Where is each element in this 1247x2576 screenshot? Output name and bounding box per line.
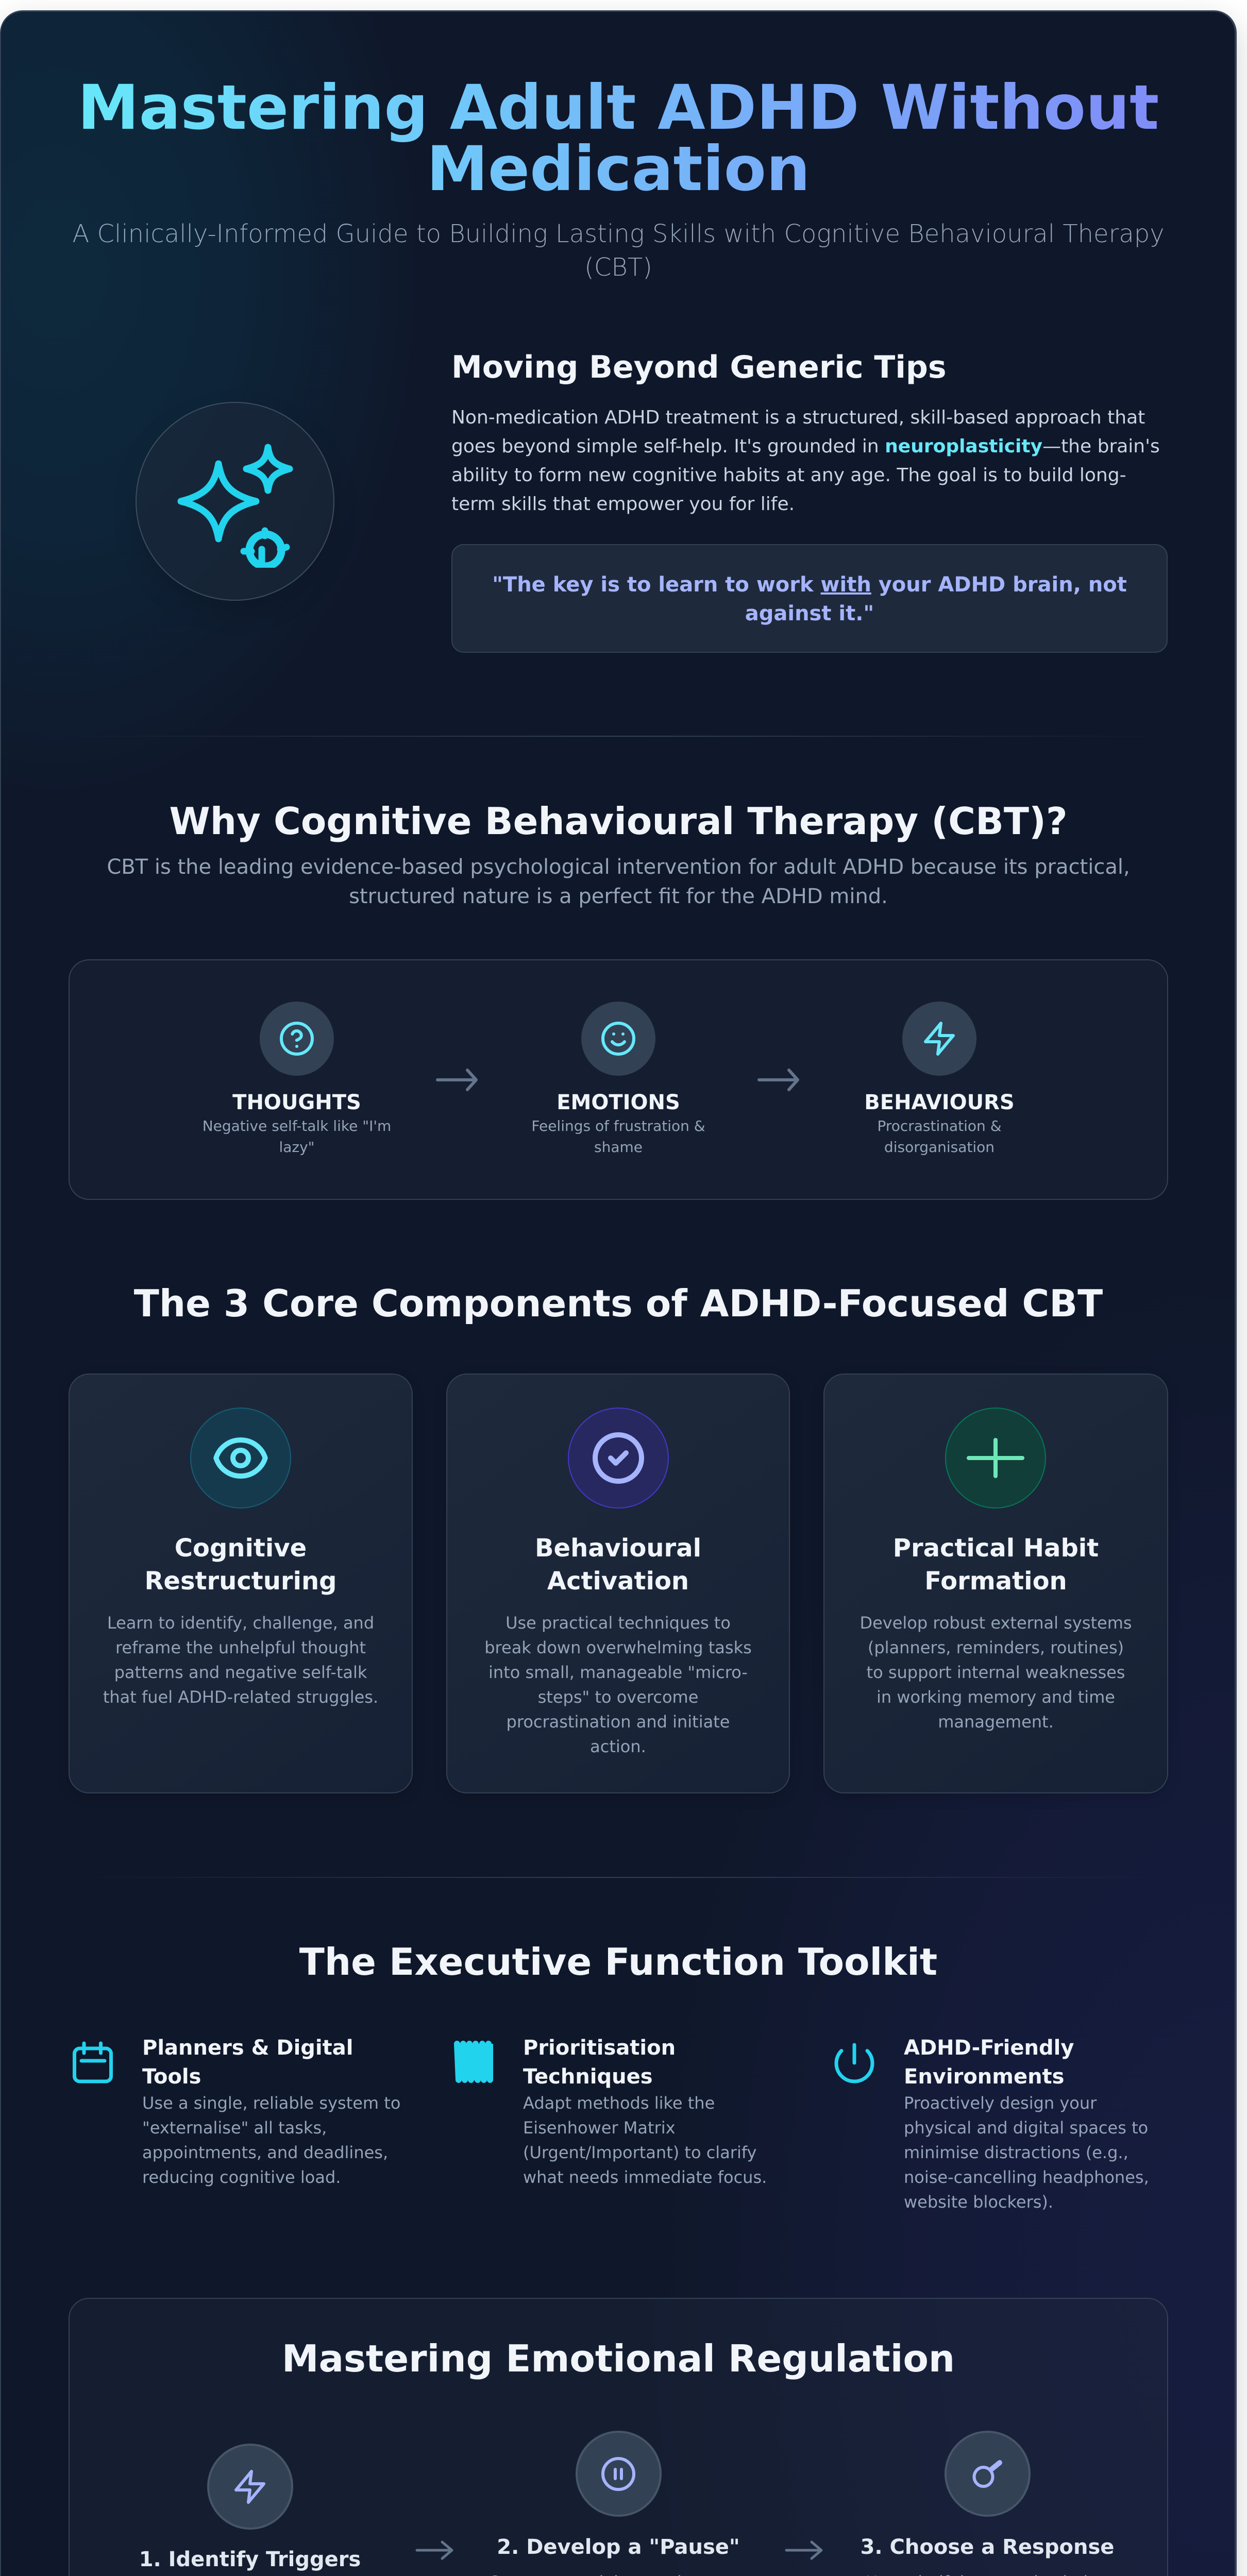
card text — [70, 1611, 412, 1709]
subtitle: (CBT) — [584, 253, 652, 282]
card text — [447, 1611, 789, 1759]
step: emotions — [531, 1002, 705, 1155]
step title: 3. Choose a Response — [861, 2535, 1114, 2559]
body text: goes beyond simple self-help. It's grounded in neuroplasticity—the brain's — [451, 436, 1160, 457]
card text: that fuel ADHD-related struggles. — [103, 1687, 378, 1707]
icon: lightning — [207, 2444, 293, 2530]
card title: Restructuring — [144, 1567, 337, 1596]
card text — [824, 1611, 1167, 1734]
item text — [142, 2091, 400, 2190]
card text: break down overwhelming tasks — [484, 1638, 752, 1657]
arrow — [757, 1069, 799, 1091]
step title: 1. Identify Triggers — [139, 2548, 361, 2571]
step title: 2. Develop a "Pause" — [497, 2535, 740, 2559]
item text: appointments, and deadlines, — [142, 2143, 388, 2162]
icon: plus — [945, 1408, 1046, 1509]
card title: Formation — [924, 1567, 1067, 1596]
section: executive function toolkit — [69, 1929, 1168, 2218]
section: core components — [69, 1282, 1168, 1793]
icon: question — [260, 1002, 334, 1076]
item text: noise-cancelling headphones, — [904, 2167, 1149, 2187]
card text: management. — [938, 1712, 1054, 1732]
label: EMOTIONS — [557, 1091, 680, 1114]
title — [69, 78, 1168, 200]
card title — [447, 1532, 789, 1598]
item text: Adapt methods like the — [523, 2093, 715, 2113]
card text: action. — [590, 1737, 646, 1756]
description: disorganisation — [884, 1139, 995, 1155]
label: BEHAVIOURS — [864, 1091, 1015, 1114]
body text — [451, 407, 1160, 515]
card text: to support internal weaknesses — [867, 1663, 1125, 1682]
item title: Prioritisation — [523, 2036, 676, 2060]
description: lazy" — [279, 1139, 315, 1155]
description — [877, 1117, 1002, 1155]
arrow — [784, 2540, 823, 2561]
icon: check circle — [568, 1408, 669, 1509]
arrow — [436, 1069, 478, 1091]
icon: calendar — [69, 2038, 120, 2084]
panel: emotional regulation — [69, 2298, 1168, 2576]
item text: website blockers). — [904, 2192, 1053, 2212]
item title: ADHD-Friendly — [904, 2036, 1074, 2060]
icon: spoon — [944, 2431, 1031, 2517]
body text: Non-medication ADHD treatment is a structured, skill-based approach that — [451, 407, 1145, 428]
item: planners — [69, 2033, 419, 2188]
card text: Use practical techniques to — [505, 1613, 731, 1633]
heading: The 3 Core Components of ADHD-Focused CBT — [134, 1282, 1103, 1325]
callout quote — [451, 544, 1168, 653]
card title: Cognitive — [175, 1534, 307, 1563]
card text: into small, manageable "micro- — [488, 1663, 748, 1682]
item text — [904, 2091, 1149, 2214]
card text: Learn to identify, challenge, and — [107, 1613, 374, 1633]
heading: Moving Beyond Generic Tips — [451, 349, 947, 385]
card text: procrastination and initiate — [507, 1712, 730, 1732]
item title — [142, 2033, 353, 2091]
item text: minimise distractions (e.g., — [904, 2143, 1128, 2162]
card title: Practical Habit — [893, 1534, 1099, 1563]
description: Feelings of frustration & — [531, 1117, 705, 1134]
card: cognitive restructuring — [69, 1374, 413, 1793]
item title: Environments — [904, 2065, 1064, 2089]
intro text: structured nature is a perfect fit for the ADHD mind. — [349, 885, 888, 908]
card text: patterns and negative self-talk — [114, 1663, 367, 1682]
step: identify triggers — [85, 2444, 415, 2576]
intro text — [107, 855, 1130, 908]
card text: in working memory and time — [877, 1687, 1115, 1707]
icon: priority block — [449, 2038, 501, 2084]
description: Negative self-talk like "I'm — [203, 1117, 391, 1134]
step: thoughts — [203, 1002, 391, 1155]
icon: eye — [190, 1408, 291, 1509]
panel: moving beyond generic tips — [136, 349, 1168, 653]
item text: "externalise" all tasks, — [142, 2118, 327, 2138]
item text: Eisenhower Matrix — [523, 2118, 676, 2138]
card title — [824, 1532, 1167, 1598]
heading: Why Cognitive Behavioural Therapy (CBT)? — [169, 800, 1068, 843]
step: behaviours — [864, 1002, 1015, 1155]
icon: pause — [575, 2431, 662, 2517]
icon: lightning — [902, 1002, 976, 1076]
card text: steps" to overcome — [538, 1687, 698, 1707]
heading: Mastering Emotional Regulation — [282, 2337, 955, 2380]
item text: what needs immediate focus. — [523, 2167, 767, 2187]
item title — [904, 2033, 1074, 2091]
step: choose a response — [822, 2431, 1152, 2576]
card text: (planners, reminders, routines) — [868, 1638, 1124, 1657]
title: Medication — [427, 133, 810, 205]
step: develop a pause — [453, 2431, 783, 2576]
item title: Techniques — [523, 2065, 653, 2089]
card: behavioural activation — [446, 1374, 790, 1793]
subtitle: A Clinically-Informed Guide to Building Lasting Skills with Cognitive Behavioural Therapy — [72, 219, 1165, 248]
title: Mastering Adult ADHD Without — [78, 72, 1159, 144]
item text: Use a single, reliable system to — [142, 2093, 400, 2113]
description: Procrastination & — [877, 1117, 1002, 1134]
item text: reducing cognitive load. — [142, 2167, 341, 2187]
label: THOUGHTS — [232, 1091, 361, 1114]
item: friendly environments — [830, 2033, 1168, 2214]
section: why CBT — [69, 800, 1168, 1200]
description — [203, 1117, 391, 1155]
arrow — [415, 2540, 454, 2561]
card: practical habit formation — [823, 1374, 1168, 1793]
intro text: CBT is the leading evidence-based psychological intervention for adult ADHD because its practical, — [107, 855, 1130, 879]
icon: sparkles in circle — [136, 402, 334, 601]
icon: smile — [581, 1002, 655, 1076]
card title: Behavioural — [535, 1534, 701, 1563]
description — [531, 1117, 705, 1155]
body text: term skills that empower you for life. — [451, 494, 795, 515]
description: shame — [594, 1139, 643, 1155]
item text — [523, 2091, 767, 2190]
item: prioritisation — [449, 2033, 800, 2188]
card title — [144, 1534, 337, 1596]
item text: physical and digital spaces to — [904, 2118, 1148, 2138]
item title: Planners & Digital — [142, 2036, 353, 2060]
icon: power — [830, 2038, 882, 2084]
item title: Tools — [142, 2065, 201, 2089]
card title: Activation — [547, 1567, 689, 1596]
subtitle — [72, 219, 1165, 282]
header — [72, 72, 1165, 282]
body text: ability to form new cognitive habits at any age. The goal is to build long- — [451, 465, 1126, 486]
card text: reframe the unhelpful thought — [115, 1638, 366, 1657]
card text: Develop robust external systems — [860, 1613, 1132, 1633]
item text: (Urgent/Important) to clarify — [523, 2143, 756, 2162]
panel: CBT cycle — [69, 959, 1168, 1200]
item text: Proactively design your — [904, 2093, 1097, 2113]
heading: The Executive Function Toolkit — [299, 1940, 937, 1984]
callout quote: "The key is to learn to work with your ADHD brain, not — [492, 573, 1127, 597]
item title — [523, 2033, 676, 2091]
callout quote: against it." — [745, 602, 874, 625]
